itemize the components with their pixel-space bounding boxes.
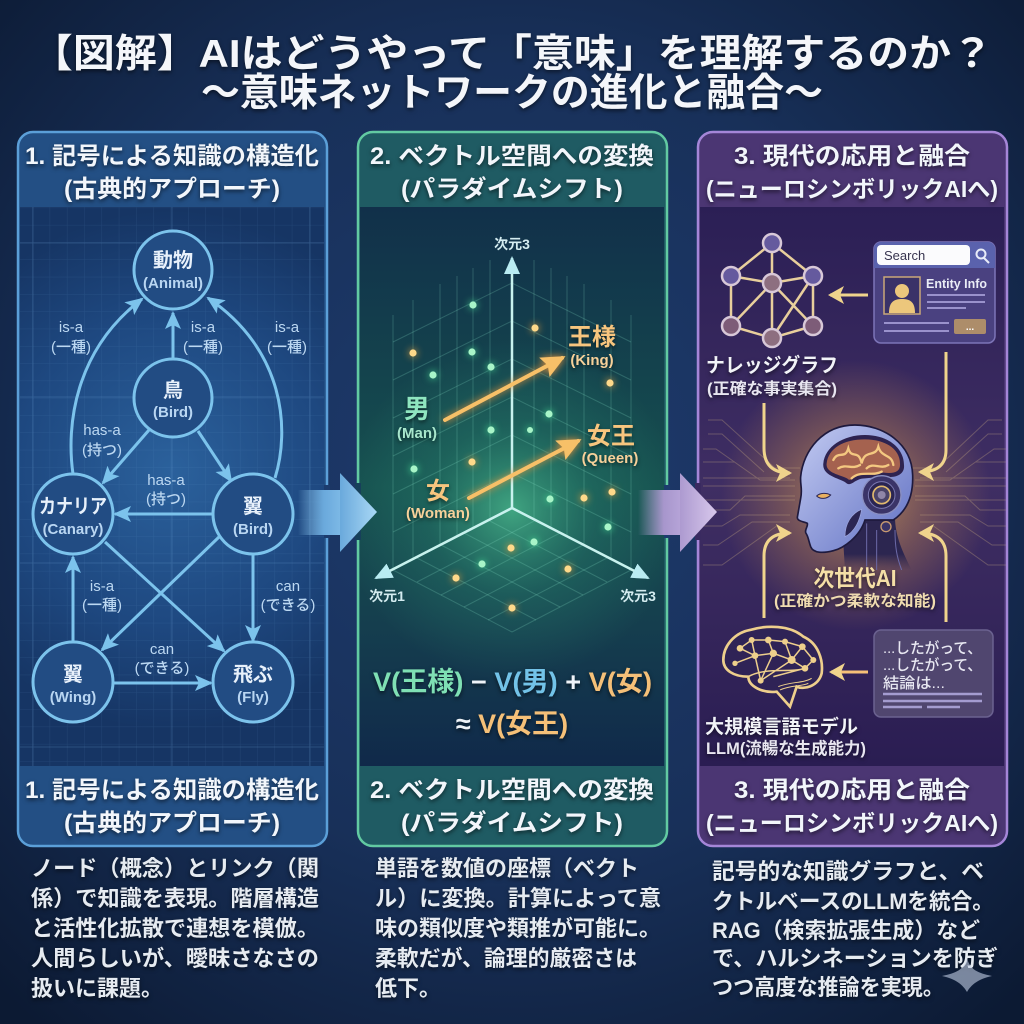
word labels: (Man) <box>397 425 437 442</box>
semantic network edges <box>71 298 282 683</box>
panel 2 footer: (パラダイムシフト) <box>401 809 623 837</box>
edge labels: can <box>150 641 174 658</box>
panel: vector space <box>358 132 667 846</box>
search card <box>874 242 995 343</box>
node: fly: (Fly) <box>237 689 269 706</box>
edge labels: can <box>276 578 300 595</box>
description: panel 2: 単語を数値の座標（ベクト <box>375 856 639 881</box>
icon: entity avatar <box>884 277 920 314</box>
panel 1 footer: 1. 記号による知識の構造化 <box>25 777 319 804</box>
node: animal: 動物 <box>153 249 193 272</box>
LLM label <box>705 715 866 758</box>
panel: symbolic knowledge structure <box>18 132 327 846</box>
edge labels: is-a <box>59 319 84 336</box>
panel 2 header: (パラダイムシフト) <box>401 175 623 203</box>
panel 2 footer <box>370 777 654 837</box>
edge labels: (一種) <box>183 339 223 356</box>
title: 【図解】AIはどうやって「意味」を理解するのか？ <box>31 33 993 76</box>
next-generation AI label <box>774 565 936 610</box>
circuit traces <box>703 420 1007 565</box>
description: panel 1: 扱いに課題。 <box>31 976 163 1001</box>
description: panel 3: で、ハルシネーションを防ぎ <box>712 946 998 971</box>
description: panel 3: RAG（検索拡張生成）など <box>712 918 980 943</box>
edge labels: (できる) <box>135 660 189 677</box>
edge labels: (一種) <box>267 339 307 356</box>
knowledge graph label: ナレッジグラフ <box>706 353 838 377</box>
axis labels: 次元1 <box>369 588 405 604</box>
node: canary: カナリア <box>39 496 107 518</box>
node: canary: (Canary) <box>43 521 103 538</box>
word labels: 女王 <box>587 423 635 450</box>
orange data points <box>409 324 616 612</box>
panel 2 chart background <box>360 207 664 766</box>
icon: knowledge graph <box>722 234 822 347</box>
generated text card: ...したがって、 <box>883 656 982 674</box>
LLM label: 大規模言語モデル <box>705 715 858 738</box>
axis labels: 次元3 <box>620 588 656 604</box>
edge labels: (持つ) <box>82 442 122 459</box>
node: fly <box>213 642 293 722</box>
word labels: 男 <box>404 394 430 424</box>
node: animal <box>134 231 212 309</box>
node: canary <box>33 474 113 554</box>
description: panel 1: ノード（概念）とリンク（関 <box>31 856 319 881</box>
vector formula <box>373 667 652 739</box>
icon: AI head <box>797 425 913 570</box>
3D axes <box>376 258 648 578</box>
knowledge graph label <box>706 353 838 398</box>
word labels: (King) <box>570 352 614 369</box>
word labels <box>397 324 638 522</box>
panel 2 header <box>370 143 654 203</box>
panel 3 footer <box>706 777 998 836</box>
description: panel 1: 係）で知識を表現。階層構造 <box>31 886 319 911</box>
node: wing (bird) <box>213 474 293 554</box>
axis labels <box>369 236 656 604</box>
panel 2 header: 2. ベクトル空間への変換 <box>370 143 654 170</box>
word labels: (Woman) <box>406 505 470 522</box>
panel 1 footer: (古典的アプローチ) <box>64 810 280 837</box>
node: wing <box>33 642 113 722</box>
panel 3 header: 3. 現代の応用と融合 <box>734 143 970 170</box>
border gaps around arrows <box>324 483 701 540</box>
panel 1 header <box>25 143 319 203</box>
search card: ... <box>966 322 974 333</box>
word labels: 王様 <box>568 324 616 351</box>
description: panel 2: 低下。 <box>375 976 441 1001</box>
next-generation AI label: 次世代AI <box>814 565 896 591</box>
word labels: 女 <box>426 478 450 505</box>
knowledge graph label: (正確な事実集合) <box>707 379 837 398</box>
panel 3 footer: 3. 現代の応用と融合 <box>734 777 970 804</box>
description: panel 2: ル）に変換。計算によって意 <box>375 886 661 911</box>
vector formula: V(王様) − V(男) + V(女) <box>373 667 652 697</box>
icon: neural brain <box>723 627 822 707</box>
panel 3 background <box>700 207 1004 766</box>
vector formula: ≈ V(女王) <box>456 709 568 739</box>
3D vector space grid <box>393 260 631 632</box>
description: panel 2: 味の類似度や類推が可能に。 <box>375 916 661 941</box>
node: animal: (Animal) <box>143 275 203 292</box>
node: bird: 鳥 <box>163 379 183 402</box>
edge labels: (持つ) <box>146 491 186 508</box>
node: bird: (Bird) <box>153 404 193 421</box>
description: panel 1: 人間らしいが、曖昧さなさの <box>31 946 319 971</box>
node: wing (bird): 翼 <box>243 496 263 518</box>
edge labels: (一種) <box>51 339 91 356</box>
green data points <box>410 301 612 568</box>
arrow: panel 1 to panel 2 <box>298 473 377 552</box>
description: panel 1 <box>31 856 319 1001</box>
description: panel 3 <box>712 859 998 1000</box>
node: wing (bird): (Bird) <box>233 521 273 538</box>
title: 〜意味ネットワークの進化と融合〜 <box>201 72 823 115</box>
analogy arrows <box>445 358 578 498</box>
edge labels <box>51 319 315 677</box>
description: panel 2 <box>375 856 661 1001</box>
watermark sparkle <box>942 958 992 992</box>
panel 3 footer: (ニューロシンボリックAIへ) <box>706 810 998 836</box>
generated text card <box>874 630 993 717</box>
panel 1 blueprint diagram area <box>20 207 324 766</box>
gold arrows <box>764 295 946 672</box>
panel 3 header <box>706 143 998 202</box>
edge labels: is-a <box>191 319 216 336</box>
icon: magnifier <box>976 250 989 263</box>
description: panel 3: クトルベースのLLMを統合。 <box>712 889 994 914</box>
arrow: panel 2 to panel 3 <box>638 473 717 552</box>
axis labels: 次元3 <box>494 236 530 252</box>
next-generation AI label: (正確かつ柔軟な知能) <box>774 591 936 610</box>
panel 2 footer: 2. ベクトル空間への変換 <box>370 777 654 804</box>
edge labels: is-a <box>90 578 115 595</box>
title <box>31 33 993 115</box>
description: panel 3: つつ高度な推論を実現。 <box>712 975 944 1000</box>
edge labels: has-a <box>83 422 121 439</box>
node: fly: 飛ぶ <box>233 663 273 686</box>
generated text card: 結論は... <box>883 675 945 692</box>
description: panel 3: 記号的な知識グラフと、ベ <box>712 859 984 884</box>
description: panel 1: と活性化拡散で連想を模倣。 <box>31 916 319 941</box>
node: wing: 翼 <box>63 664 83 686</box>
panel 3 header: (ニューロシンボリックAIへ) <box>706 176 998 202</box>
panel 1 header: 1. 記号による知識の構造化 <box>25 143 319 170</box>
edge labels: has-a <box>147 472 185 489</box>
edge labels: (できる) <box>261 597 315 614</box>
word labels: (Queen) <box>582 450 638 467</box>
panel 1 header: (古典的アプローチ) <box>64 176 280 203</box>
node: bird <box>134 359 212 437</box>
edge labels: is-a <box>275 319 300 336</box>
LLM label: LLM(流暢な生成能力) <box>706 738 866 758</box>
panel 1 footer <box>25 777 319 837</box>
search card: Search <box>884 248 925 263</box>
edge labels: (一種) <box>82 597 122 614</box>
node: wing: (Wing) <box>50 689 96 706</box>
search card: Entity Info <box>926 277 987 291</box>
description: panel 2: 柔軟だが、論理的厳密さは <box>375 946 637 971</box>
panel: modern applications <box>698 132 1007 846</box>
generated text card: ...したがって、 <box>883 639 982 657</box>
